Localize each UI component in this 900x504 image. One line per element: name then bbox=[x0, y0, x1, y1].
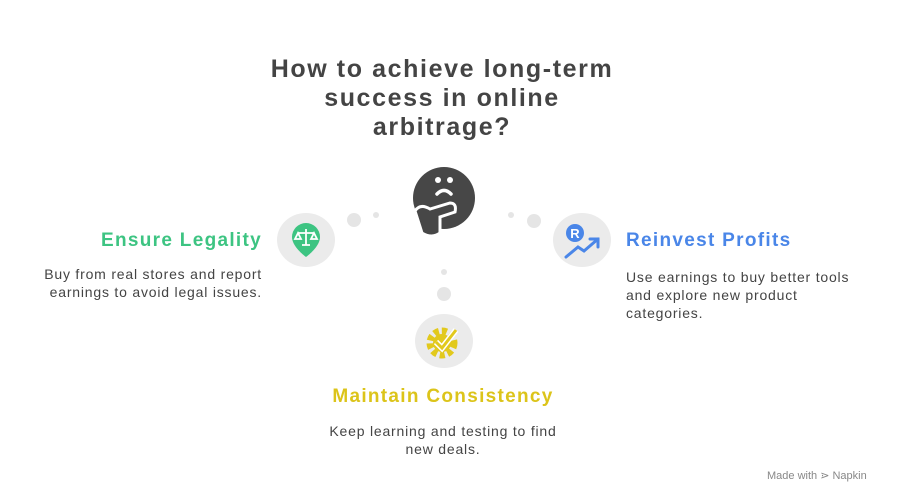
heading: Ensure Legality: Ensure Legality bbox=[101, 230, 262, 251]
icon: reinvest: R bbox=[570, 226, 580, 241]
footer: made with napkin: Made with ⋗ Napkin bbox=[767, 470, 867, 482]
title: How to achieve long-term bbox=[271, 55, 613, 83]
text: consistency bbox=[329, 423, 557, 457]
title: success in online bbox=[324, 84, 560, 112]
text: legality: earnings to avoid legal issues. bbox=[50, 284, 262, 300]
text: consistency: new deals. bbox=[406, 441, 480, 457]
title bbox=[271, 55, 613, 141]
text: reinvest: Use earnings to buy better tools bbox=[626, 269, 849, 285]
icon: reinvest bbox=[553, 213, 611, 267]
text: legality: Buy from real stores and report bbox=[44, 266, 262, 282]
heading: Maintain Consistency: Maintain Consistency bbox=[332, 386, 554, 407]
text: consistency: Keep learning and testing to find bbox=[329, 423, 557, 439]
icon: thinking face bbox=[413, 167, 475, 234]
text: reinvest bbox=[626, 269, 849, 321]
text: reinvest: categories. bbox=[626, 305, 703, 321]
text: legality bbox=[44, 266, 262, 300]
icon: legality bbox=[277, 213, 335, 267]
text: reinvest: and explore new product bbox=[626, 287, 798, 303]
title: arbitrage? bbox=[373, 113, 511, 141]
heading: Reinvest Profits: Reinvest Profits bbox=[626, 230, 791, 251]
icon: consistency gear bbox=[415, 314, 473, 368]
